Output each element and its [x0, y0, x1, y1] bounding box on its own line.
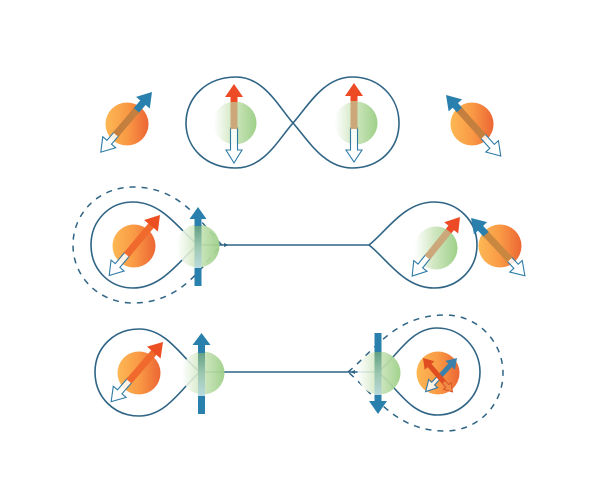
crossed arrow: red and white	[418, 354, 457, 396]
solid teardrop orbital	[91, 202, 198, 288]
orange atom with arrow	[464, 212, 531, 282]
crossed arrow: blue and white	[421, 354, 462, 396]
small direction arrow on line	[224, 243, 229, 247]
green atom with vertical blue arrow	[358, 333, 400, 414]
orange atom, top left	[94, 86, 159, 158]
top row: spin pair with figure-eight orbital	[94, 77, 507, 168]
connecting line	[198, 244, 370, 246]
figure-eight orbital	[186, 77, 399, 168]
small direction arrow on line	[350, 370, 355, 374]
solid teardrop orbital	[378, 328, 480, 415]
orange atom with arrow	[102, 209, 167, 281]
bottom row: left orbital and atoms	[95, 329, 378, 416]
connecting line	[200, 371, 378, 373]
orange atom, top right	[439, 89, 507, 162]
green atom with up-down arrow, right	[334, 83, 378, 162]
bottom row: right orbital and atoms	[348, 315, 503, 431]
green atom with vertical blue arrow	[182, 333, 224, 414]
orange atom with crossed arrows	[416, 352, 462, 396]
dashed outer orbital	[348, 315, 503, 431]
green atom with up-down arrow, left	[214, 84, 256, 163]
solid teardrop orbital	[95, 329, 200, 416]
middle row: right orbital and atoms	[369, 202, 531, 288]
green atom with vertical blue arrow	[176, 207, 220, 286]
green atom with arrow	[405, 211, 467, 282]
dashed outer orbital	[73, 187, 222, 303]
solid teardrop orbital	[369, 202, 477, 288]
middle row: left orbital and atoms	[73, 187, 370, 303]
orange atom with arrow	[104, 336, 170, 408]
